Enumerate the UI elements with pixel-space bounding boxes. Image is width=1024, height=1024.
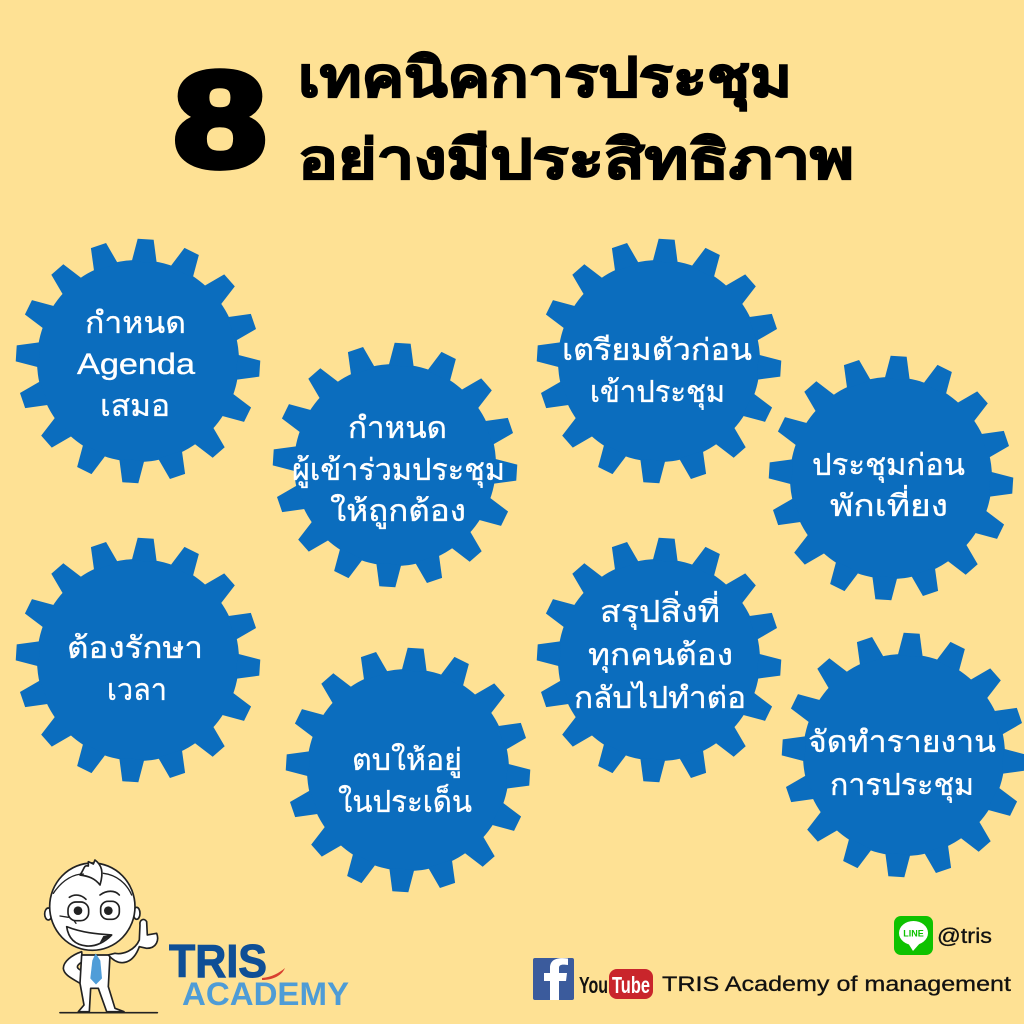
gear: answer on point — [279, 641, 537, 899]
gear: keep time — [9, 531, 267, 789]
gear: set agenda: เสมอ — [100, 390, 170, 423]
gear: set agenda: Agenda — [77, 348, 195, 381]
gear: right attendees: ให้ถูกต้อง — [330, 494, 466, 529]
icon: YouTube: You — [579, 972, 608, 998]
title: 8 — [174, 44, 266, 195]
gear: keep time: เวลา — [107, 674, 167, 707]
icon: YouTube: Tube — [612, 972, 650, 998]
icon: Facebook — [533, 958, 574, 1000]
gear: answer on point: ในประเด็น — [338, 783, 472, 819]
gear: set agenda — [9, 232, 267, 490]
gear: write meeting report — [775, 626, 1024, 884]
icon: YouTube — [579, 969, 653, 999]
channel name: TRIS Academy of management — [662, 973, 1011, 996]
gear: summarize follow-ups: สรุปสิ่งที่ — [600, 591, 720, 631]
gear: summarize follow-ups: กลับไปทำต่อ — [574, 680, 746, 715]
gear: right attendees: ผู้เข้าร่วมประชุม — [292, 454, 505, 489]
TRIS Academy logo: TRIS — [169, 935, 267, 987]
gear: set agenda: กำหนด — [85, 307, 186, 340]
gear: prepare before the meeting — [530, 232, 788, 490]
gear: summarize follow-ups: ทุกคนต้อง — [588, 639, 733, 674]
gear: answer on point: ตบให้อยู่ — [352, 743, 462, 778]
TRIS Academy logo: ACADEMY — [182, 976, 349, 1012]
gear: write meeting report: การประชุม — [830, 769, 974, 804]
gear: prepare before the meeting: เตรียมตัวก่อน — [562, 334, 752, 367]
LINE handle: @tris — [937, 925, 992, 948]
gear: meet before lunch: ประชุมก่อน — [812, 449, 965, 484]
gear: meet before lunch: พักเที่ยง — [830, 485, 948, 523]
title — [174, 44, 854, 195]
title: อย่างมีประสิทธิภาพ — [298, 130, 854, 190]
mascot character — [45, 860, 158, 1013]
icon: LINE: LINE — [903, 928, 924, 938]
gear: right attendees — [266, 336, 524, 594]
gear: meet before lunch — [762, 349, 1020, 607]
gear: write meeting report: จัดทำรายงาน — [808, 726, 996, 759]
title: เทคนิคการประชุม — [298, 48, 792, 112]
gear: keep time: ต้องรักษา — [67, 632, 203, 665]
gear: prepare before the meeting: เข้าประชุม — [590, 376, 725, 411]
gear: right attendees: กำหนด — [348, 412, 447, 445]
gear: summarize follow-ups — [530, 531, 788, 789]
icon: LINE — [894, 916, 933, 955]
TRIS Academy logo — [169, 935, 349, 1012]
